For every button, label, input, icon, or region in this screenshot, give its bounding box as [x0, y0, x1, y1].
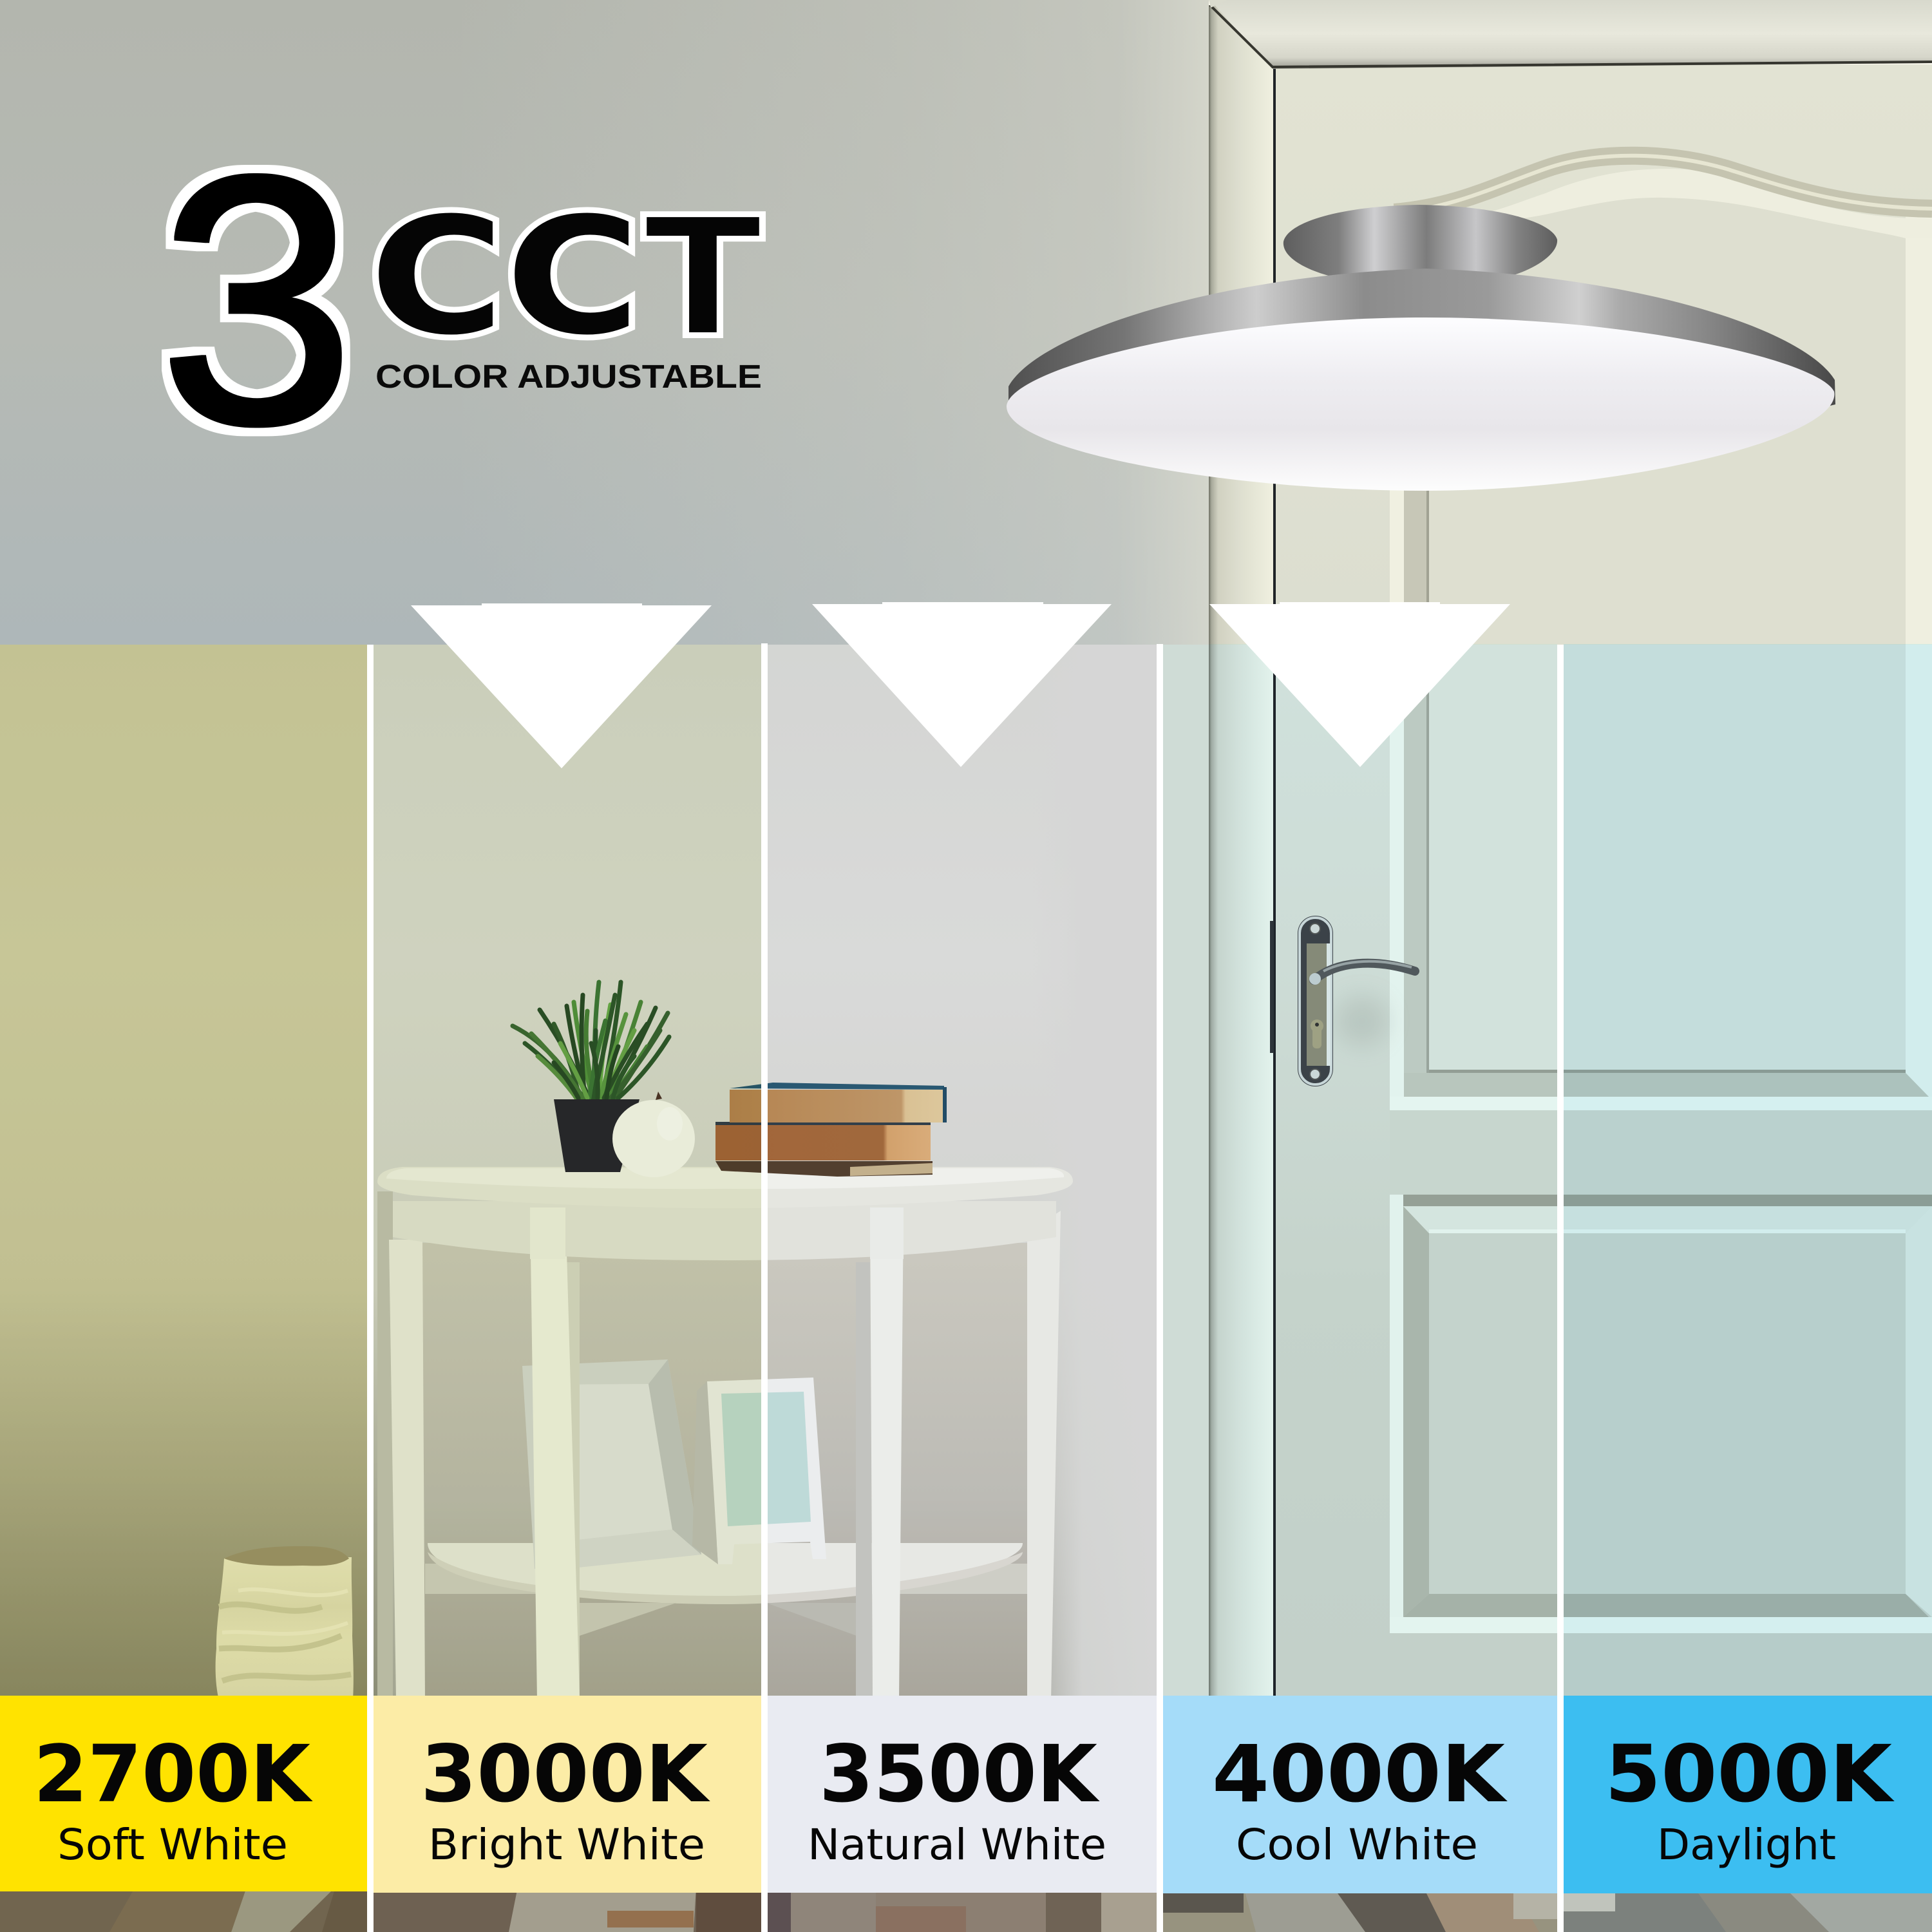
upper wall	[0, 0, 1209, 645]
lower shelf	[428, 1543, 1023, 1603]
pot	[554, 1099, 639, 1172]
kelvin label: 3000K	[421, 1728, 711, 1820]
kelvin label: 4000K	[1212, 1728, 1508, 1820]
fixture canopy	[1283, 205, 1557, 277]
wall shadow beside vase	[0, 1288, 380, 1700]
left front leg	[530, 1208, 580, 1700]
back legs	[389, 1240, 425, 1700]
colour name: Natural White	[808, 1820, 1106, 1870]
colour name: Soft White	[57, 1820, 288, 1870]
floor strip	[0, 1887, 1932, 1932]
colour temperature tint: 4000K column	[1163, 644, 1557, 1700]
big numeral 3: 3	[158, 102, 355, 498]
fixture diffuser lens	[1007, 317, 1834, 491]
colour name: Daylight	[1657, 1820, 1836, 1870]
white picture frame	[692, 1378, 826, 1564]
colour temperature tint: 3000K column	[374, 644, 761, 1700]
wall	[0, 644, 1211, 1700]
door middle rail	[1390, 1110, 1932, 1195]
subtitle: COLOR ADJUSTABLE	[375, 358, 762, 395]
upper wall right glow	[451, 0, 1209, 645]
colour temperature tint: 2700K column	[0, 644, 367, 1700]
potted plant	[513, 982, 669, 1172]
keyhole	[1311, 1019, 1323, 1048]
logo: 3 CCT color adjustable	[158, 102, 762, 498]
swatch: 3500K Natural White	[768, 1696, 1157, 1893]
top book	[730, 1090, 944, 1122]
downward arrow: centre	[812, 602, 1112, 767]
divider lines between colour temperature columns	[367, 643, 1564, 1932]
downward arrow: right	[1209, 602, 1510, 767]
warm light on upper door	[1209, 0, 1932, 645]
swatch: 4000K Cool White	[1163, 1696, 1557, 1893]
ceramic apple	[612, 1092, 695, 1177]
fixture metal shade	[1009, 269, 1835, 412]
back plate	[1298, 916, 1333, 1086]
CCT wordmark: C	[370, 184, 504, 371]
grass blades	[513, 982, 669, 1098]
CCT wordmark: C	[506, 184, 640, 371]
swatch: 3000K Bright White	[374, 1696, 761, 1893]
swatch: 5000K Daylight	[1564, 1696, 1932, 1893]
door upper panel	[1390, 198, 1932, 1110]
kelvin label: 3500K	[819, 1728, 1100, 1820]
ceiling light fixture	[1007, 205, 1835, 491]
colour name: Cool White	[1236, 1820, 1478, 1870]
kelvin label: 5000K	[1605, 1728, 1895, 1820]
door arch molding	[1394, 156, 1932, 238]
downward arrow: left	[411, 603, 712, 768]
table braces	[580, 1603, 676, 1636]
door lower panel	[1390, 1195, 1932, 1633]
console table	[377, 1167, 1073, 1700]
right front leg	[856, 1208, 904, 1700]
bottom book	[715, 1161, 933, 1177]
shelf back strip	[425, 1564, 1027, 1594]
wavy ceramic vase	[216, 1546, 354, 1700]
colour name: Bright White	[428, 1820, 705, 1870]
table top	[377, 1167, 1073, 1208]
colour temperature tint: 5000K column	[1564, 644, 1932, 1700]
middle book	[715, 1124, 931, 1160]
CCT wordmark: T	[645, 182, 761, 368]
door header trim	[1209, 0, 1932, 69]
door	[1209, 5, 1932, 1700]
kelvin label: 2700K	[33, 1728, 313, 1820]
door frame jamb	[1209, 5, 1275, 1700]
colour temperature tint: 3500K column	[768, 644, 1157, 1700]
shadow under table	[422, 1243, 1028, 1700]
handle shadow	[1335, 995, 1389, 1046]
lever	[1314, 963, 1415, 980]
wall light right of table	[1030, 644, 1211, 1700]
screws	[1310, 923, 1320, 934]
silver picture frame	[522, 1359, 701, 1570]
swatch: 2700K Soft White	[0, 1696, 367, 1891]
upper untinted wall and door band	[0, 0, 1932, 645]
door handle	[1298, 916, 1415, 1086]
table apron	[393, 1201, 1056, 1260]
stack of books	[715, 1083, 947, 1177]
